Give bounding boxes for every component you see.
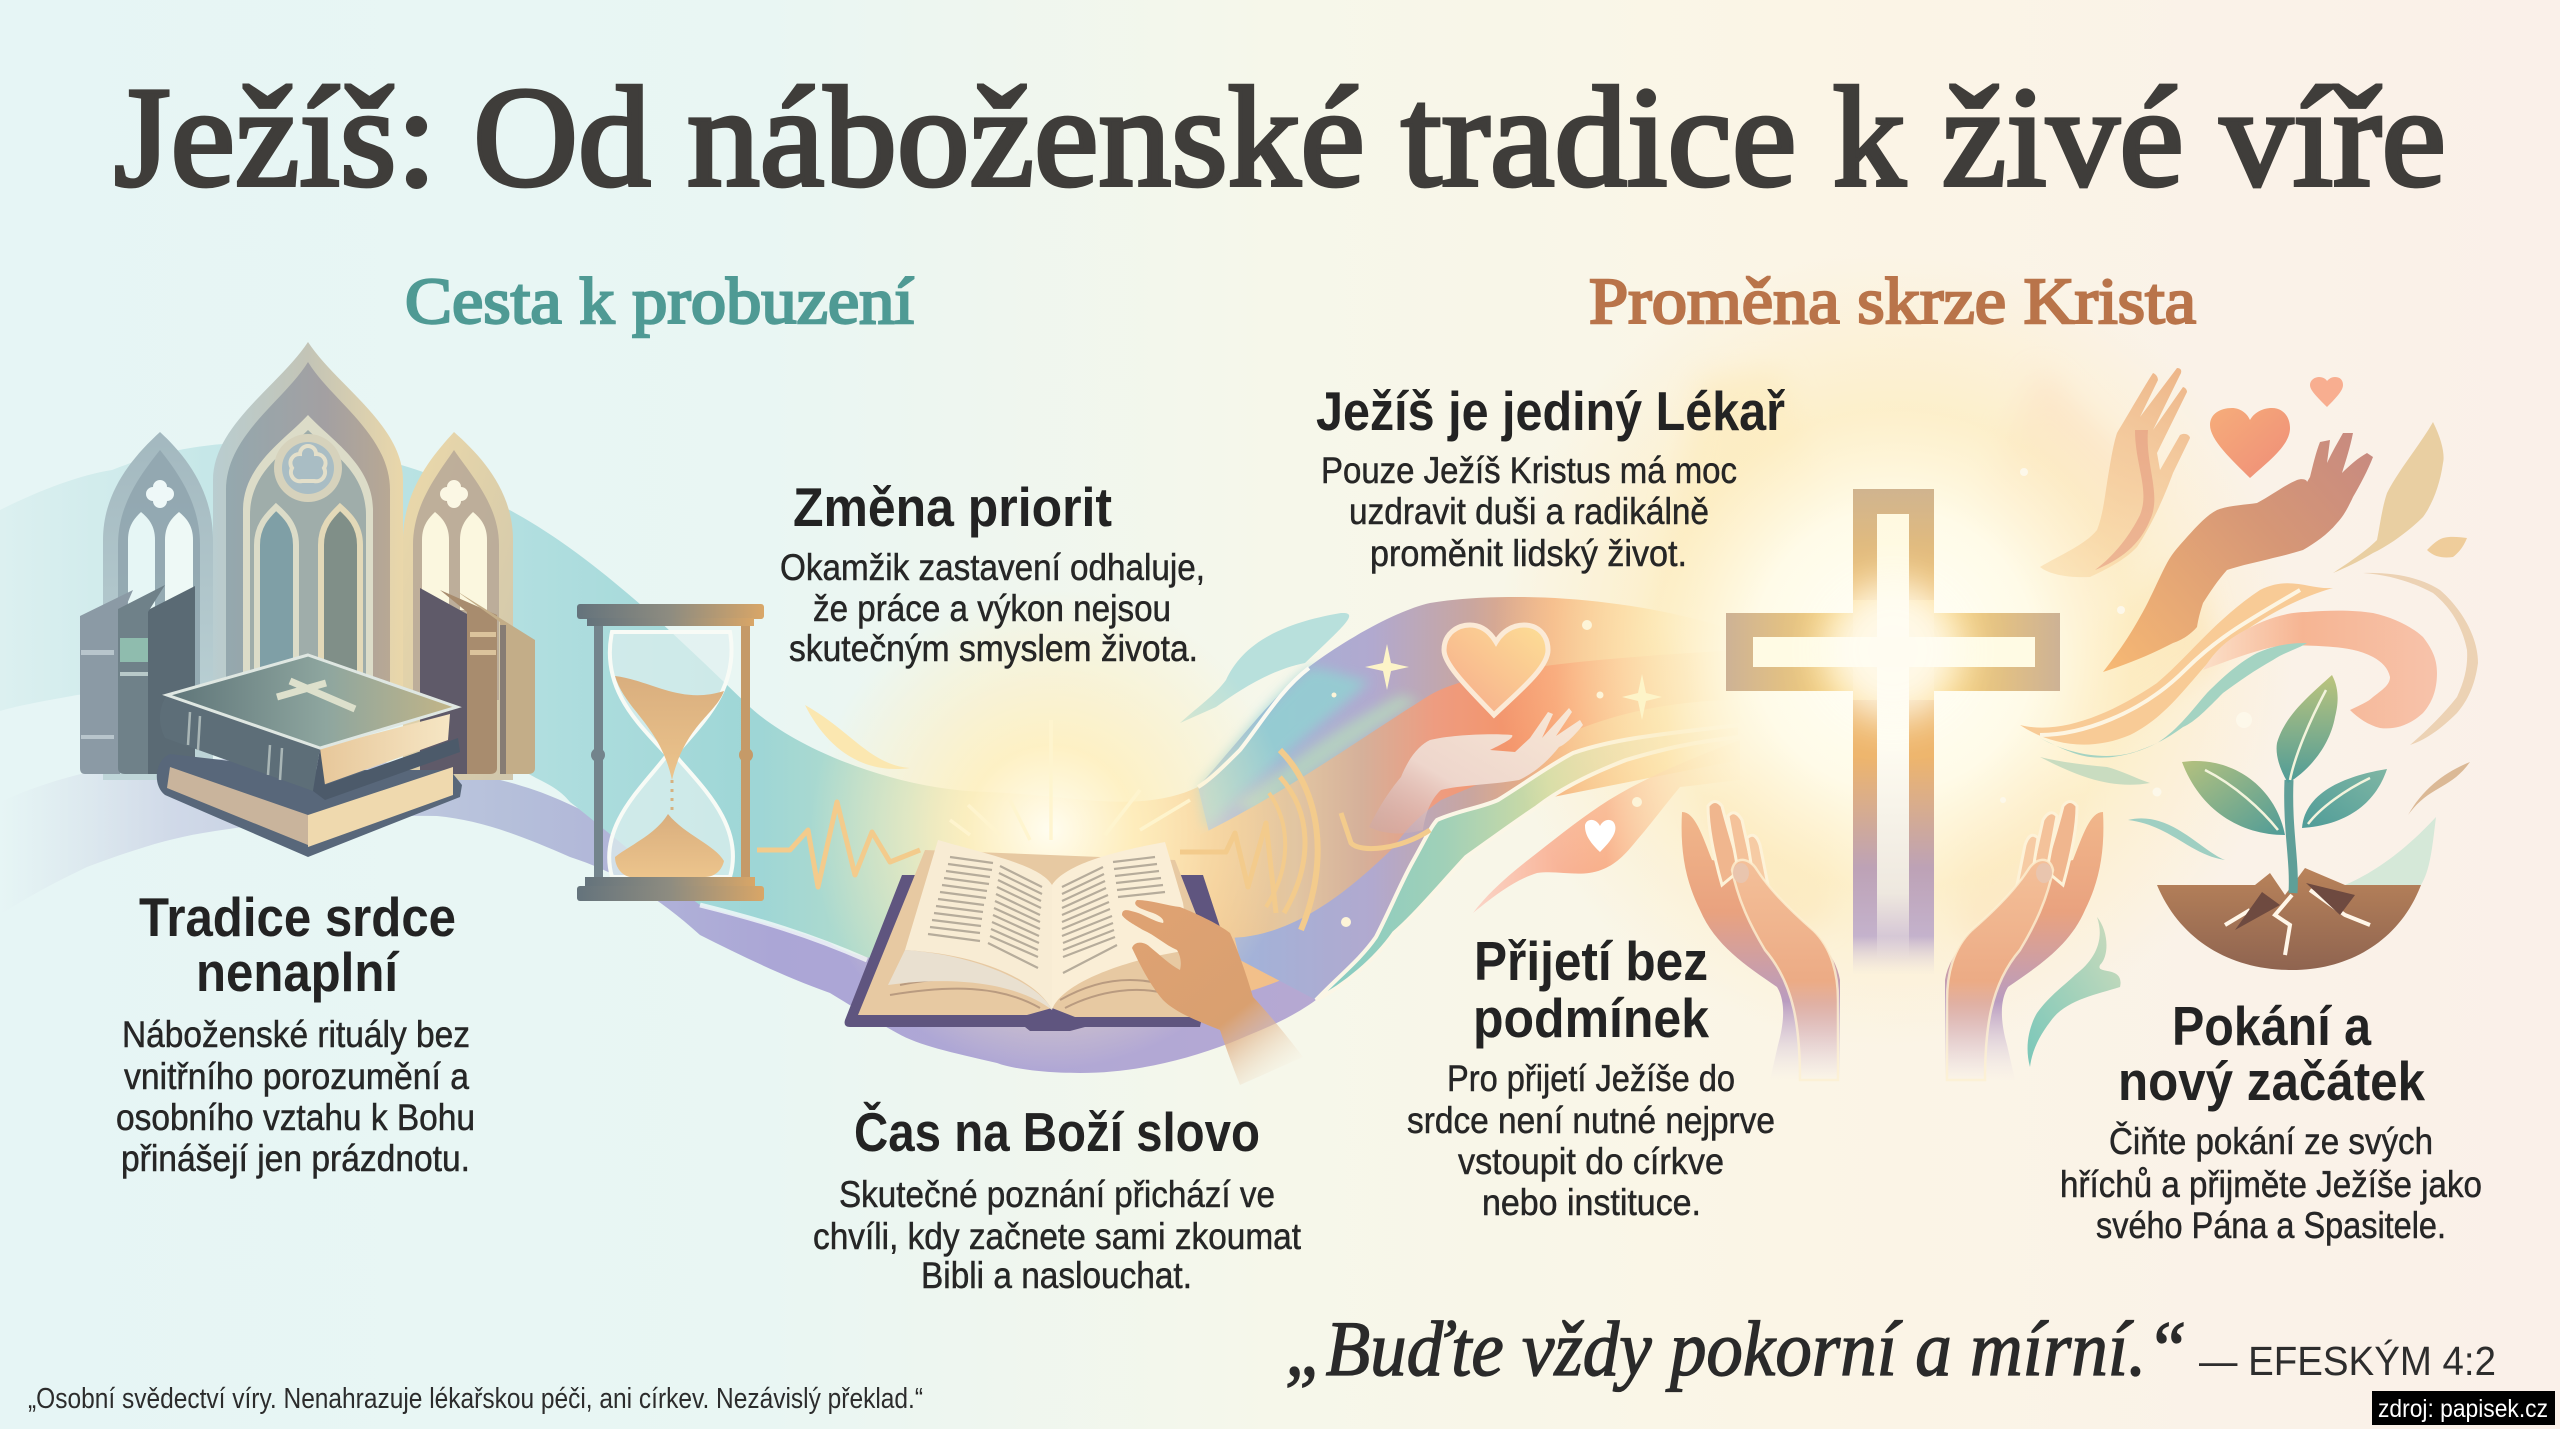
flow band: coral and tan — [1200, 650, 1740, 940]
leaf veins — [2205, 690, 2370, 830]
book body: page edges — [890, 979, 1170, 1008]
top book — [160, 655, 460, 800]
flow band: violet to gold — [1198, 597, 1740, 1000]
arc — [2363, 573, 2478, 745]
wisps — [2128, 818, 2225, 860]
icon: hourglass — [577, 604, 764, 901]
decor: heartbeat lines — [757, 750, 1430, 930]
right page — [1052, 842, 1190, 1010]
bottom book — [157, 754, 462, 857]
text block: Tradice srdce nenaplní — [116, 886, 475, 1179]
big heart — [2210, 408, 2290, 478]
small heart — [2310, 377, 2343, 407]
decor: yellow wisp — [805, 705, 910, 769]
stem — [2289, 780, 2293, 893]
illustration: cross — [1726, 489, 2060, 975]
small heart — [1585, 820, 1615, 852]
text block: Změna priorit: Okamžik zastavení odhaluje, — [780, 547, 1205, 588]
icon: sprout in cracked soil — [2028, 675, 2470, 1067]
text block: Tradice srdce nenaplní: vnitřního porozumění a — [124, 1056, 469, 1097]
sparkles — [1365, 644, 1662, 720]
text block: Změna priorit: že práce a výkon nejsou — [813, 588, 1171, 629]
text block: Ježíš je jediný Lékař: proměnit lidský život. — [1370, 533, 1687, 574]
text block: Čas na Boží slovo: Bibli a naslouchat. — [921, 1255, 1192, 1296]
text block: Přijetí bez podmínek — [1407, 930, 1775, 1223]
left arch — [103, 432, 213, 780]
text block: Tradice srdce nenaplní: Náboženské rituály bez — [122, 1014, 470, 1055]
text block: Přijetí bez podmínek: podmínek — [1473, 987, 1709, 1049]
standing books right — [420, 588, 535, 774]
text block: Tradice srdce nenaplní: přinášejí jen prázdnotu. — [121, 1138, 470, 1179]
book body: page block — [858, 850, 1210, 1017]
rear hand shading — [2095, 430, 2154, 570]
illustration: glow around open book — [810, 590, 1290, 1070]
text block: Přijetí bez podmínek: nebo instituce. — [1482, 1182, 1701, 1223]
leaves — [2277, 675, 2338, 783]
illustration: cross glow — [1494, 250, 2294, 1050]
text block: Tradice srdce nenaplní: osobního vztahu k Bohu — [116, 1097, 475, 1138]
source badge: zdroj: papisek.cz — [2378, 1395, 2548, 1423]
text block: Pokání a nový začátek: Pokání a — [2172, 995, 2371, 1057]
text block: Přijetí bez podmínek: Pro přijetí Ježíše do — [1447, 1058, 1735, 1099]
text block: Ježíš je jediný Lékař: uzdravit duši a radikálně — [1349, 491, 1709, 532]
icon: raised hand left — [1682, 802, 1840, 1080]
ribbon: peach swirl — [2203, 611, 2437, 728]
book cover — [845, 875, 1220, 1031]
text block: Čas na Boží slovo: chvíli, kdy začnete sami zkoumat — [813, 1216, 1302, 1257]
text block: Ježíš je jediný Lékař — [1316, 380, 1786, 574]
text block: Ježíš je jediný Lékař: Pouze Ježíš Kristus má moc — [1321, 450, 1737, 491]
flow band: mint strip — [1235, 695, 1420, 815]
icon: gothic church windows — [80, 342, 535, 857]
light rays above book — [950, 720, 1190, 840]
icon: upper hands and hearts — [2040, 368, 2467, 672]
footnote: „Osobní svědectví víry. Nenahrazuje lékařskou péči, ani církev. Nezávislý překlad.“ — [28, 1383, 923, 1415]
text block: Přijetí bez podmínek: srdce není nutné nejprve — [1407, 1100, 1775, 1141]
lines of text on pages — [928, 857, 1165, 973]
dots — [1332, 620, 1642, 927]
soil — [2157, 868, 2421, 970]
ribbon: orange flow — [2020, 583, 2333, 745]
text block: Přijetí bez podmínek: vstoupit do církve — [1458, 1141, 1724, 1182]
rear hand — [2040, 368, 2190, 577]
text block: Přijetí bez podmínek: Přijetí bez — [1474, 930, 1708, 992]
flow stripe: coral — [1473, 740, 1740, 913]
lifted hand — [1369, 708, 1583, 833]
icon: heart above open hand — [1332, 620, 1662, 927]
title: Ježíš: Od náboženské tradice k živé víře — [114, 58, 2446, 216]
heading: right section: Proměna skrze Krista — [1589, 265, 2196, 338]
right arch — [403, 432, 513, 780]
flow accent: teal wisp — [1180, 613, 1349, 723]
center arch — [213, 342, 403, 720]
text block: Ježíš je jediný Lékař: Ježíš je jediný Lékař — [1316, 380, 1786, 442]
text block: Čas na Boží slovo: Skutečné poznání přichází ve — [839, 1174, 1275, 1215]
quote: — EFESKÝM 4:2 — [2199, 1338, 2496, 1384]
text block: Změna priorit: Změna priorit — [793, 476, 1112, 538]
front hand — [2103, 433, 2373, 672]
left page — [905, 840, 1052, 1010]
text block: Změna priorit: skutečným smyslem života. — [789, 628, 1198, 669]
text block: Pokání a nový začátek: svého Pána a Spasitele. — [2096, 1205, 2446, 1246]
icon: open book with hand — [845, 720, 1303, 1085]
text block: Změna priorit — [780, 476, 1205, 669]
text block: Čas na Boží slovo — [813, 1101, 1302, 1296]
white dots — [2000, 468, 2252, 803]
ribbon: teal — [2040, 643, 2307, 758]
text block: Pokání a nový začátek: hříchů a přijměte Ježíše jako — [2060, 1164, 2482, 1205]
text block: Tradice srdce nenaplní: Tradice srdce — [139, 886, 456, 948]
text block: Pokání a nový začátek: nový začátek — [2118, 1050, 2425, 1112]
text block: Čas na Boží slovo: Čas na Boží slovo — [854, 1101, 1260, 1163]
standing books left — [80, 585, 195, 774]
small leaf — [2427, 537, 2467, 557]
text block: Pokání a nový začátek — [2060, 995, 2482, 1246]
pale leaf wisp — [2040, 757, 2150, 785]
heart — [1444, 625, 1548, 715]
illustration: flowing journey waves — [0, 443, 1740, 1073]
icon: raised hand right — [1945, 802, 2103, 1080]
heading: left section: Cesta k probuzení — [405, 265, 914, 338]
text block: Tradice srdce nenaplní: nenaplní — [196, 941, 400, 1003]
flow band: teal strip — [1198, 668, 1370, 830]
decor: swirl and flowing ribbons — [2000, 468, 2478, 803]
text block: Pokání a nový začátek: Čiňte pokání ze svých — [2109, 1121, 2433, 1162]
quote: „Buďte vždy pokorní a mírní.“ — [1285, 1305, 2187, 1392]
feather — [2333, 422, 2444, 573]
reading hand — [1122, 900, 1303, 1085]
flow stripe: mint — [1316, 725, 1740, 1000]
mint hill — [2345, 817, 2436, 885]
